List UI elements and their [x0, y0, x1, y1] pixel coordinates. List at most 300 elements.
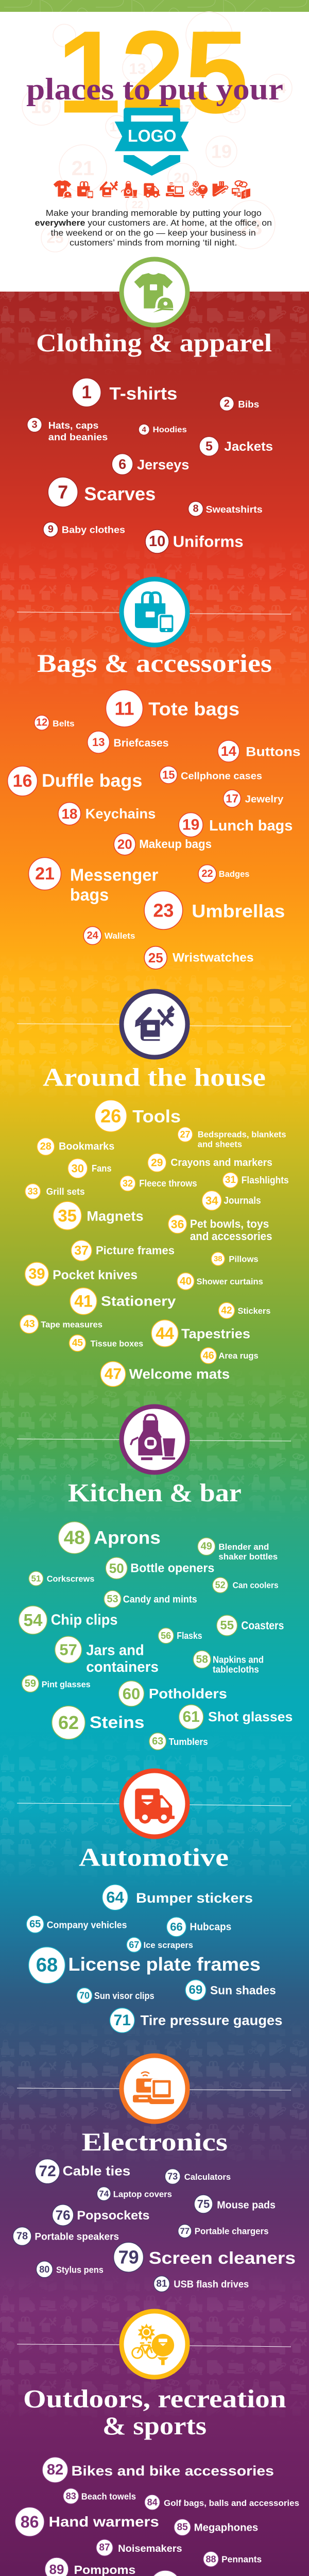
item 79: 79: [118, 2247, 139, 2268]
item 62: Steins: [90, 1713, 144, 1732]
item 12: [35, 715, 75, 730]
item 26: [95, 1100, 181, 1132]
faint ghost number circles behind title: 25: [46, 230, 64, 246]
item 6: Jerseys: [137, 457, 189, 472]
item 13: 13: [92, 736, 105, 749]
item 5: 5: [205, 439, 213, 453]
item 62: 62: [58, 1712, 79, 1733]
item 33: 33: [28, 1186, 38, 1196]
item 39: Pocket knives: [53, 1268, 138, 1282]
item 39: 39: [28, 1266, 45, 1282]
item 2: Bibs: [238, 399, 259, 410]
item 75: Mouse pads: [217, 2199, 276, 2211]
item 32: Fleece throws: [139, 1178, 197, 1189]
faint ghost number circles behind title: 17: [178, 103, 192, 116]
item 67: [127, 1937, 193, 1952]
item 61: [179, 1705, 293, 1729]
item 43: [20, 1315, 102, 1333]
item 51: Corkscrews: [47, 1574, 94, 1584]
item 40: 40: [180, 1276, 192, 1287]
item 78: 78: [16, 2231, 28, 2242]
item 36: [168, 1215, 272, 1243]
item 51: [29, 1571, 94, 1586]
faint ghost number circles behind title: 20: [174, 170, 190, 185]
panel: kitchen and bar: [17, 1406, 293, 1750]
icon: t-shirt and cap: [122, 259, 187, 325]
item 70: Sun visor clips: [94, 1991, 154, 2001]
item 50: Bottle openers: [130, 1562, 214, 1575]
item 8: [188, 501, 263, 516]
item 24: [83, 926, 135, 945]
item 34: Journals: [224, 1195, 261, 1206]
icon: delivery truck: [17, 1771, 291, 1837]
item 64: Bumper stickers: [136, 1890, 253, 1906]
item 86: [15, 2507, 159, 2536]
item 12: 12: [36, 717, 47, 728]
intro paragraph: [35, 208, 272, 248]
item 17: [224, 790, 284, 807]
item 37: Picture frames: [96, 1244, 175, 1257]
item 3: and beanies: [48, 432, 108, 442]
item 19: Lunch bags: [209, 818, 293, 834]
item 58: tablecloths: [213, 1665, 259, 1675]
item 42: [218, 1302, 270, 1318]
item 70: [77, 1988, 154, 2003]
panel: around the house: [17, 991, 291, 1386]
item 20: Makeup bags: [139, 837, 212, 851]
item 10: Uniforms: [173, 533, 244, 551]
item 64: [102, 1885, 253, 1910]
item 54: [19, 1606, 117, 1634]
item 21: Messenger: [70, 866, 158, 885]
item 83: 83: [66, 2491, 76, 2501]
item 1: T-shirts: [109, 384, 177, 403]
item 88: 88: [205, 2554, 216, 2564]
item 24: Wallets: [105, 931, 135, 941]
item 78: Portable speakers: [35, 2231, 119, 2242]
item 13: [88, 731, 169, 753]
item 48: Aprons: [94, 1528, 161, 1548]
item 66: 66: [170, 1921, 183, 1933]
item 28: Bookmarks: [59, 1141, 114, 1153]
item 61: Shot glasses: [208, 1709, 293, 1724]
item 12: Belts: [53, 719, 75, 728]
item 29: [148, 1154, 272, 1172]
item 1: [72, 378, 177, 407]
intro paragraph: the weekend or on the go — keep your business in: [51, 228, 256, 238]
item 81: USB flash drives: [174, 2279, 249, 2290]
item 8: Sweatshirts: [206, 504, 263, 515]
item 58: Napkins and: [213, 1654, 264, 1665]
item 63: [149, 1733, 208, 1750]
item 5: Jackets: [225, 439, 273, 454]
item 51: 51: [31, 1573, 41, 1584]
item 73: 73: [167, 2171, 178, 2181]
item 26: 26: [100, 1106, 121, 1126]
item 68: License plate frames: [68, 1954, 261, 1975]
item 18: 18: [61, 806, 77, 822]
item 45: 45: [72, 1337, 83, 1349]
item 59: Pint glasses: [42, 1680, 91, 1689]
item 38: 38: [214, 1255, 222, 1263]
item 75: 75: [197, 2198, 210, 2210]
item 43: 43: [24, 1318, 35, 1330]
item 85: [174, 2519, 258, 2536]
heading: electronics: Electronics: [82, 2127, 228, 2156]
item 56: 56: [161, 1631, 171, 1641]
item 13: Briefcases: [113, 737, 169, 749]
item 9: Baby clothes: [62, 524, 125, 535]
item 11: [106, 690, 239, 727]
panel: bags and accessories: [8, 579, 301, 969]
item 78: [13, 2227, 119, 2245]
item 11: 11: [114, 698, 134, 719]
item 35: Magnets: [87, 1209, 144, 1224]
item 18: [58, 803, 156, 825]
item 14: 14: [221, 743, 236, 759]
item 72: Cable ties: [63, 2163, 130, 2179]
faint ghost number circles behind title: 13: [129, 61, 146, 77]
item 83: Beach towels: [81, 2491, 136, 2501]
item 74: [97, 2187, 172, 2201]
item 21: 21: [35, 864, 55, 884]
item 16: [8, 766, 142, 796]
item 57: 57: [59, 1640, 77, 1659]
item 7: 7: [58, 481, 68, 503]
item 47: [100, 1362, 230, 1386]
item 53: Candy and mints: [123, 1595, 197, 1605]
item 36: Pet bowls, toys: [190, 1217, 269, 1230]
item 33: [25, 1184, 85, 1199]
item 77: [178, 2224, 269, 2238]
item 28: 28: [40, 1141, 52, 1152]
item 39: [25, 1262, 138, 1286]
icon: logo badge: [115, 108, 189, 176]
item 37: [71, 1240, 175, 1261]
item 57: containers: [86, 1659, 159, 1675]
icon: pencil, book and wrench: [17, 991, 291, 1057]
item 68: [29, 1947, 261, 1984]
item 50: 50: [109, 1561, 124, 1576]
panel: automotive: [17, 1771, 291, 2033]
item 25: 25: [148, 950, 163, 965]
item 86: Hand warmers: [48, 2514, 159, 2530]
item 38: Pillows: [229, 1255, 259, 1264]
panel: outdoors, recreation and sports: [15, 2311, 299, 2576]
item 67: 67: [129, 1940, 139, 1950]
item 81: 81: [156, 2278, 167, 2290]
item 23: 23: [153, 900, 174, 921]
intro paragraph: everywhere your customers are. At home, at the office, on: [35, 218, 272, 228]
item 85: 85: [177, 2522, 188, 2533]
item 33: Grill sets: [46, 1187, 85, 1197]
item 52: 52: [215, 1580, 226, 1590]
item 14: Buttons: [246, 745, 301, 759]
item 82: Bikes and bike accessories: [71, 2463, 274, 2479]
item 41: [70, 1288, 176, 1315]
item 82: [42, 2457, 274, 2483]
item 7: Scarves: [84, 483, 156, 504]
heading: kitchen and bar: Kitchen & bar: [68, 1478, 242, 1507]
item 6: [112, 453, 189, 475]
faint ghost number circles behind title: 22: [132, 199, 143, 211]
item 44: [151, 1320, 250, 1347]
item 21: [29, 857, 158, 904]
item 32: [120, 1176, 197, 1191]
item 40: [177, 1273, 263, 1290]
item 9: 9: [48, 524, 54, 535]
item 71: [110, 2008, 282, 2033]
item 27: 27: [180, 1129, 191, 1140]
item 60: 60: [123, 1685, 140, 1703]
item 77: 77: [180, 2226, 190, 2236]
item 31: 31: [225, 1175, 236, 1185]
heading: outdoors, recreation and sports: [23, 2384, 286, 2440]
item 74: Laptop covers: [113, 2190, 172, 2199]
item 72: [35, 2159, 130, 2183]
green top band: [0, 0, 309, 12]
item 80: Stylus pens: [56, 2265, 104, 2275]
item 55: [217, 1615, 284, 1636]
item 47: Welcome mats: [129, 1366, 230, 1382]
item 58: [193, 1651, 264, 1675]
icon: tote bag and phone: [17, 579, 291, 645]
item 53: 53: [107, 1594, 118, 1605]
item 87: [96, 2539, 182, 2556]
item 10: 10: [149, 533, 165, 550]
item 22: Badges: [219, 869, 249, 879]
item 10: [145, 530, 244, 553]
item 49: 49: [201, 1541, 212, 1552]
item 84: 84: [147, 2497, 158, 2507]
item 80: [36, 2261, 104, 2278]
item 75: [194, 2195, 276, 2213]
item 67: Ice scrapers: [144, 1940, 193, 1950]
item 84: Golf bags, balls and accessories: [164, 2498, 299, 2508]
item 48: 48: [64, 1527, 85, 1548]
item 15: Cellphone cases: [181, 771, 262, 782]
faint ghost number circles behind title: 23: [239, 216, 262, 239]
item 19: 19: [182, 816, 199, 834]
item 36: 36: [171, 1217, 184, 1231]
item 27: [178, 1127, 286, 1149]
item 59: [22, 1675, 91, 1692]
item 49: [198, 1538, 278, 1562]
item 22: 22: [201, 868, 213, 879]
item 54: Chip clips: [51, 1612, 117, 1628]
item 55: 55: [220, 1619, 234, 1632]
item 6: 6: [118, 456, 126, 472]
faint ghost number circles behind title: 16: [31, 96, 52, 117]
item 66: Hubcaps: [190, 1922, 231, 1933]
item 42: Stickers: [238, 1306, 270, 1316]
item 16: Duffle bags: [42, 771, 142, 791]
item 76: Popsockets: [77, 2209, 149, 2223]
intro paragraph: customers’ minds from morning ‘til night.: [70, 238, 237, 248]
item 73: Calculators: [184, 2172, 231, 2182]
item 30: 30: [72, 1162, 84, 1175]
item 42: 42: [221, 1305, 232, 1316]
item 83: [63, 2488, 136, 2504]
heading: clothing and apparel: Clothing & apparel: [36, 328, 272, 357]
faint ghost number circles behind title: 21: [72, 157, 94, 180]
item 74: 74: [99, 2189, 109, 2199]
item 90: [150, 2570, 291, 2576]
item 68: 68: [36, 1955, 58, 1976]
item 43: Tape measures: [41, 1320, 102, 1330]
faint ghost number circles behind title: [22, 12, 292, 252]
item 20: [114, 834, 212, 855]
item 58: 58: [196, 1654, 208, 1665]
item 15: 15: [162, 769, 175, 781]
item 77: Portable chargers: [195, 2226, 269, 2236]
title: places to put your: places to put your: [26, 72, 283, 106]
item 35: 35: [58, 1206, 77, 1225]
item 63: Tumblers: [169, 1737, 208, 1747]
item 34: [202, 1191, 261, 1210]
item 21: bags: [70, 885, 109, 904]
item 82: 82: [47, 2462, 63, 2478]
icon row: nine category icons: [54, 180, 250, 199]
item 20: 20: [117, 837, 132, 852]
icon: electronics devices: [17, 2056, 291, 2122]
item 49: Blender and: [218, 1542, 269, 1552]
item 11: Tote bags: [148, 699, 239, 719]
item 69: [185, 1980, 276, 2001]
item 60: Potholders: [149, 1686, 227, 1702]
item 55: Coasters: [241, 1619, 284, 1632]
item 56: [158, 1628, 202, 1643]
item 3: [27, 417, 108, 442]
item 66: [167, 1917, 231, 1937]
faint ghost number circles behind title: 18: [110, 119, 124, 134]
item 69: 69: [189, 1983, 202, 1997]
item 85: Megaphones: [194, 2522, 258, 2533]
item 8: 8: [193, 503, 199, 515]
item 2: [219, 397, 259, 411]
heading: automotive: Automotive: [79, 1843, 229, 1872]
item 34: 34: [205, 1194, 218, 1207]
item 45: Tissue boxes: [91, 1338, 143, 1348]
item 46: 46: [203, 1350, 214, 1361]
item 15: [160, 766, 262, 784]
faint ghost number circles behind title: 24: [181, 223, 193, 234]
item 1: 1: [81, 382, 92, 402]
item 44: Tapestries: [181, 1326, 250, 1341]
item 23: Umbrellas: [192, 902, 285, 922]
item 69: Sun shades: [210, 1984, 276, 1997]
item 25: Wristwatches: [173, 951, 253, 965]
item 41: 41: [74, 1292, 93, 1311]
item 17: 17: [226, 792, 238, 805]
item 14: [218, 740, 301, 762]
icon: logo badge: LOGO: [128, 126, 176, 145]
item 46: [200, 1348, 259, 1364]
item 86: 86: [21, 2513, 39, 2531]
item 87: Noisemakers: [118, 2544, 182, 2554]
item 37: 37: [74, 1243, 89, 1258]
item 89: [45, 2557, 135, 2576]
item 64: 64: [106, 1888, 124, 1906]
item 53: [104, 1590, 197, 1607]
item 44: 44: [156, 1324, 174, 1343]
item 62: [52, 1706, 144, 1739]
panel: clothing and apparel: [27, 259, 273, 553]
item 29: Crayons and markers: [170, 1157, 272, 1168]
item 70: 70: [79, 1990, 90, 2001]
title: 125: 125: [57, 7, 248, 138]
item 65: [26, 1916, 127, 1933]
item 87: 87: [99, 2542, 110, 2553]
item 32: 32: [123, 1178, 133, 1189]
item 26: Tools: [132, 1107, 181, 1127]
item 54: 54: [24, 1611, 43, 1630]
item 71: Tire pressure gauges: [140, 2013, 282, 2028]
item 29: 29: [151, 1157, 163, 1168]
item 16: 16: [13, 771, 32, 791]
item 23: [144, 891, 285, 929]
item 72: 72: [39, 2163, 56, 2180]
item 76: 76: [56, 2207, 71, 2223]
intro paragraph: Make your branding memorable by putting your logo: [46, 208, 262, 218]
item 4: [139, 424, 187, 435]
item 45: [69, 1335, 143, 1351]
item 48: [58, 1522, 161, 1554]
item 71: 71: [114, 2012, 131, 2029]
item 88: [203, 2551, 262, 2567]
item 80: 80: [39, 2264, 49, 2275]
item 40: Shower curtains: [197, 1277, 263, 1286]
item 57: Jars and: [86, 1642, 144, 1659]
item 81: [153, 2276, 249, 2292]
icon: apron and glass: [17, 1406, 291, 1472]
item 79: [114, 2242, 296, 2272]
item 88: Pennants: [221, 2554, 262, 2564]
item 17: Jewelry: [245, 794, 284, 805]
item 30: Fans: [92, 1163, 112, 1174]
item 9: [43, 522, 125, 537]
item 76: [52, 2205, 149, 2226]
heading: bags and accessories: Bags & accessories: [37, 649, 272, 677]
faint ghost number circles behind title: 11: [201, 28, 217, 44]
item 7: [48, 477, 156, 507]
item 35: [53, 1201, 144, 1230]
item 41: Stationery: [101, 1293, 176, 1309]
faint ghost number circles behind title: 15: [228, 105, 240, 117]
heading: around the house: Around the house: [43, 1063, 266, 1092]
item 27: Bedspreads, blankets: [198, 1130, 286, 1140]
item 57: [55, 1636, 159, 1675]
heading: outdoors, recreation and sports: Outdoors, recreation: [23, 2384, 286, 2413]
item 18: Keychains: [85, 806, 156, 822]
item 2: 2: [224, 398, 230, 409]
item 30: [68, 1159, 112, 1178]
item 59: 59: [25, 1678, 36, 1689]
item 31: Flashlights: [242, 1175, 289, 1186]
item 47: 47: [105, 1365, 122, 1383]
item 49: shaker bottles: [218, 1552, 278, 1562]
icon: sun, bike and golf ball: [17, 2311, 291, 2377]
item 38: [211, 1252, 259, 1265]
item 52: [213, 1578, 279, 1593]
panel: electronics: [13, 2056, 296, 2292]
item 3: Hats, caps: [48, 420, 98, 431]
item 19: [179, 813, 293, 837]
item 60: [118, 1681, 227, 1706]
item 46: Area rugs: [218, 1351, 259, 1361]
item 27: and sheets: [198, 1140, 242, 1149]
item 4: Hoodies: [153, 426, 187, 434]
